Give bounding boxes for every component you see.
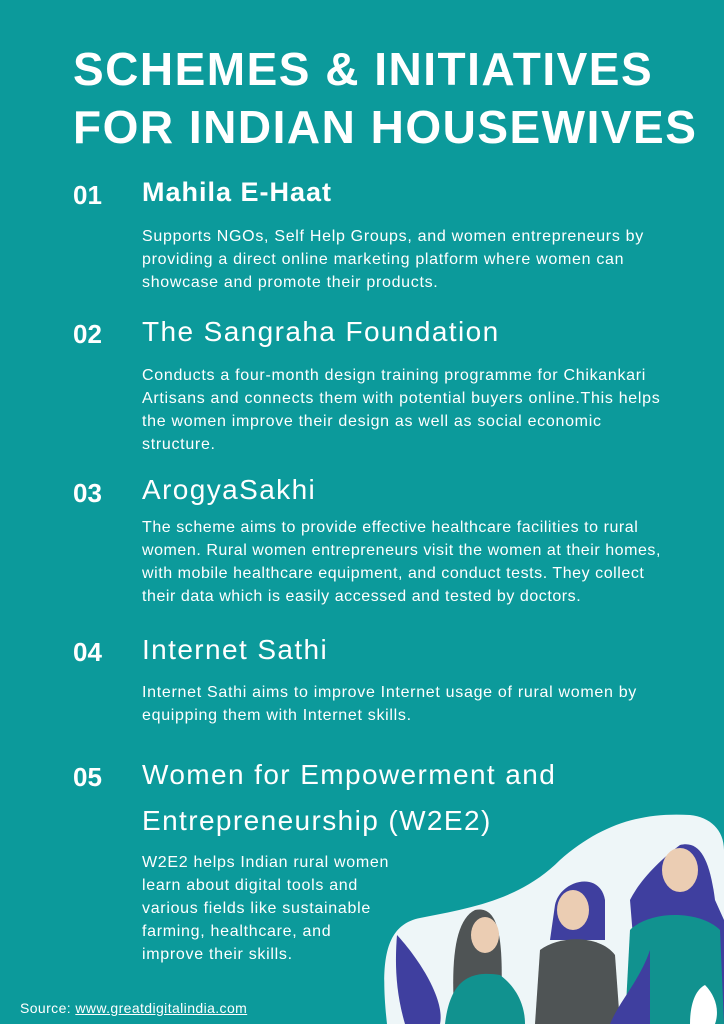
text: learn about digital tools and — [142, 877, 358, 894]
text: Women for Empowerment and — [142, 759, 556, 790]
text: 05 — [73, 762, 102, 792]
source: Source: www.greatdigitalindia.com — [20, 1000, 247, 1016]
text: Artisans and connects them with potential buyers online.This helps — [142, 390, 660, 407]
text: The scheme aims to provide effective healthcare facilities to rural — [142, 519, 638, 536]
text: Internet Sathi aims to improve Internet usage of rural women by — [142, 684, 637, 701]
text: Entrepreneurship (W2E2) — [142, 805, 492, 836]
text: 03 — [73, 478, 102, 508]
text: women. Rural women entrepreneurs visit the women at their homes, — [142, 542, 661, 559]
text: structure. — [142, 436, 216, 453]
title — [73, 43, 697, 153]
text: their data which is easily accessed and tested by doctors. — [142, 588, 581, 605]
text: Mahila E-Haat — [142, 177, 332, 207]
item 05 — [73, 759, 556, 963]
title: SCHEMES & INITIATIVES — [73, 43, 653, 95]
text: 02 — [73, 319, 102, 349]
text: 04 — [73, 637, 102, 667]
text: W2E2 helps Indian rural women — [142, 854, 389, 871]
title: FOR INDIAN HOUSEWIVES — [73, 101, 697, 153]
text: farming, healthcare, and — [142, 923, 331, 940]
text: providing a direct online marketing platform where women can — [142, 251, 624, 268]
text: various fields like sustainable — [142, 900, 371, 917]
text: Supports NGOs, Self Help Groups, and women entrepreneurs by — [142, 228, 644, 245]
item 04 — [73, 634, 637, 724]
text: Conducts a four-month design training programme for Chikankari — [142, 367, 646, 384]
item 01 — [73, 177, 644, 291]
text: with mobile healthcare equipment, and conduct tests. They collect — [142, 565, 644, 582]
text: the women improve their design as well as social economic — [142, 413, 602, 430]
text: ArogyaSakhi — [142, 474, 316, 505]
text: 01 — [73, 180, 102, 210]
item 03 — [73, 474, 661, 605]
text: Internet Sathi — [142, 634, 328, 665]
text: equipping them with Internet skills. — [142, 707, 412, 724]
text: The Sangraha Foundation — [142, 316, 500, 347]
item 02 — [73, 316, 660, 453]
text: improve their skills. — [142, 946, 293, 963]
text: showcase and promote their products. — [142, 274, 438, 291]
